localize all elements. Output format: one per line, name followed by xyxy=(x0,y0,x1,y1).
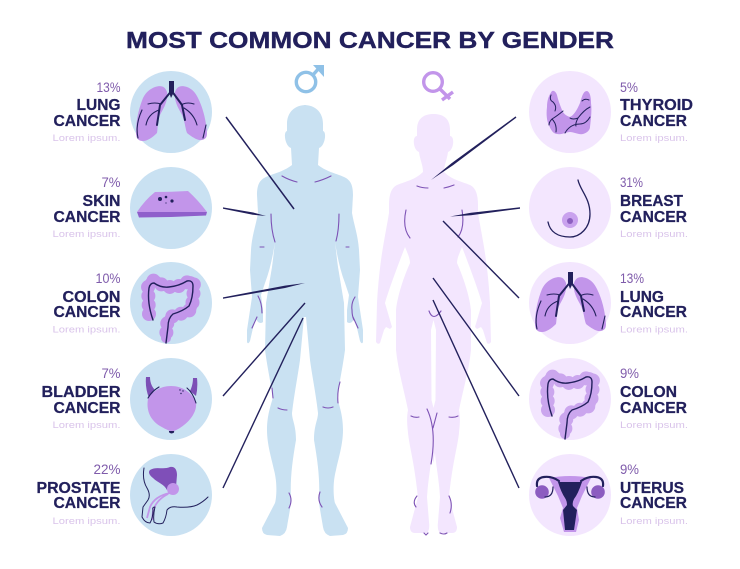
panel: female lung cancer xyxy=(529,262,688,344)
panel: male skin cancer xyxy=(52,167,212,249)
panel: male bladder cancer: Lorem ipsum. xyxy=(52,420,120,431)
panel: female colon cancer: COLON xyxy=(620,384,677,401)
panel: male lung cancer xyxy=(52,71,212,153)
icon: skin block xyxy=(137,191,207,218)
panel: female breast cancer: Lorem ipsum. xyxy=(620,229,688,240)
panel: male bladder cancer: CANCER xyxy=(54,400,120,417)
male body silhouette xyxy=(247,105,363,536)
panel: female breast cancer: CANCER xyxy=(620,209,687,226)
panel: male skin cancer: Lorem ipsum. xyxy=(52,229,120,240)
panel: female breast cancer: 31% xyxy=(620,174,643,190)
panel: male colon cancer: Lorem ipsum. xyxy=(52,324,120,336)
connector lines xyxy=(223,116,520,488)
panel: female uterus cancer: 9% xyxy=(620,461,639,477)
icon: colon xyxy=(547,377,593,439)
icon: male symbol xyxy=(296,65,324,92)
panel: female colon cancer: 9% xyxy=(620,365,639,381)
panel: male lung cancer: CANCER xyxy=(54,113,120,130)
icon: colon xyxy=(148,281,194,343)
icon: bladder xyxy=(146,377,197,434)
female body silhouette xyxy=(376,114,491,535)
panel: male prostate cancer: CANCER xyxy=(54,495,120,512)
panel: female uterus cancer: CANCER xyxy=(620,495,687,512)
panel: female uterus cancer: UTERUS xyxy=(620,480,684,497)
panel: male lung cancer: Lorem ipsum. xyxy=(52,133,120,144)
panel: female uterus cancer: Lorem ipsum. xyxy=(620,516,688,527)
panel: female colon cancer xyxy=(529,358,688,440)
panel: female breast cancer xyxy=(529,167,688,249)
panel: female colon cancer: Lorem ipsum. xyxy=(620,420,688,431)
panel: male lung cancer: 13% xyxy=(96,79,120,95)
title: MOST COMMON CANCER BY GENDER xyxy=(126,27,614,53)
panel: male prostate cancer: PROSTATE xyxy=(36,480,120,497)
panel: male skin cancer: 7% xyxy=(102,174,120,190)
panel: female lung cancer: 13% xyxy=(620,270,644,286)
panel: female thyroid cancer: 5% xyxy=(620,79,638,95)
panel: male bladder cancer: 7% xyxy=(102,365,120,381)
panel: female thyroid cancer: Lorem ipsum. xyxy=(620,133,688,144)
icon: thyroid xyxy=(547,91,591,134)
panel: male lung cancer: LUNG xyxy=(76,97,120,114)
icon: lungs xyxy=(535,272,606,332)
panel: female lung cancer: Lorem ipsum. xyxy=(620,324,688,336)
panel: male colon cancer: CANCER xyxy=(54,304,120,321)
panel: female lung cancer: LUNG xyxy=(620,289,664,306)
panel: male colon cancer: COLON xyxy=(62,289,120,306)
icon: uterus xyxy=(535,476,605,532)
panel: female lung cancer: CANCER xyxy=(620,304,687,321)
panel: male prostate cancer: Lorem ipsum. xyxy=(52,516,120,527)
panel: male bladder cancer: BLADDER xyxy=(42,384,120,401)
panel: female thyroid cancer: THYROID xyxy=(620,97,693,114)
panel: female thyroid cancer: CANCER xyxy=(620,113,687,130)
panel: female colon cancer: CANCER xyxy=(620,400,687,417)
panel: male colon cancer: 10% xyxy=(96,270,120,286)
panel: male skin cancer: CANCER xyxy=(54,209,120,226)
icon: lungs xyxy=(136,81,207,141)
panel: male prostate cancer: 22% xyxy=(94,461,120,477)
icon: prostate xyxy=(142,467,208,524)
panel: male bladder cancer xyxy=(42,358,212,440)
panel: female uterus cancer xyxy=(529,454,688,536)
panel: male prostate cancer xyxy=(36,454,212,536)
panel: female thyroid cancer xyxy=(529,71,693,153)
panel: male colon cancer xyxy=(52,262,212,344)
icon: breast xyxy=(548,180,590,237)
panel: male skin cancer: SKIN xyxy=(82,193,120,210)
panel: female breast cancer: BREAST xyxy=(620,193,684,210)
icon: female symbol xyxy=(424,73,453,100)
